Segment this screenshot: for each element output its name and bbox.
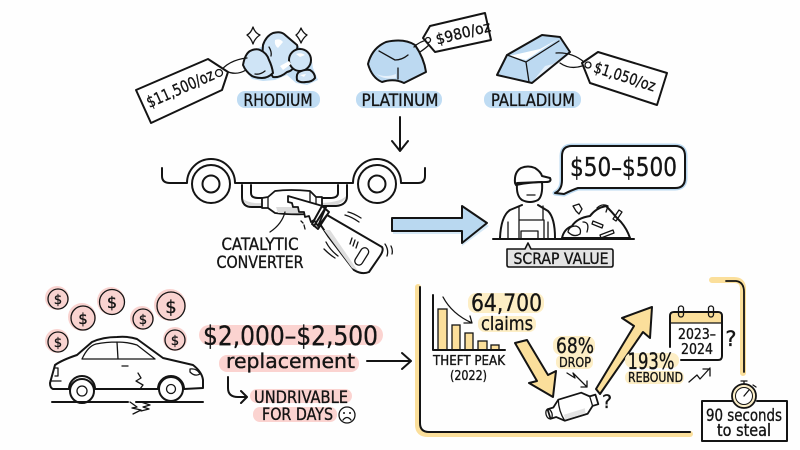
tag: scrap value: SCRAP VALUE [514,249,608,268]
icon: dollar coins: $ [139,313,147,328]
heading: replacement cost: replacement [226,349,355,373]
label: platinum: PLATINUM [362,91,438,111]
label: rhodium: RHODIUM [244,91,312,111]
car underbody [162,159,425,183]
frame [418,280,744,434]
callout: 90 seconds to steal: 90 seconds [706,406,782,425]
callout: 90 seconds to steal: to steal [717,421,771,440]
icon: dollar coins: $ [54,336,62,351]
icon: left wheel [192,165,230,203]
arrow: metals to car [392,117,408,151]
price tag: palladium [556,52,667,105]
price tag: platinum [414,13,493,52]
arrow: curved to undrivable [228,377,247,403]
icon: damaged car [50,337,203,414]
icon: reciprocating saw [288,196,392,273]
price tag: palladium: $1,050/oz [591,59,658,95]
price tag: platinum: $980/oz [434,17,493,48]
panel: car underside with converter [162,159,425,273]
callout: undrivable for days [250,388,355,425]
heading: replacement cost [199,321,383,373]
price tag: rhodium [136,58,247,123]
heading: replacement cost: $2,000–$2,500 [203,321,378,352]
icon: dollar coins: $ [54,293,62,308]
icon: catalytic converter [543,389,600,425]
icon: right wheel [358,165,396,203]
panel: precious metals [136,13,667,123]
panel: scrap yard [493,146,685,268]
label: catalytic converter: CONVERTER [216,253,304,272]
stat: 64,700 claims: claims [481,313,533,335]
arrow: rebound [596,307,652,394]
icon: platinum nugget [368,41,426,83]
icon: worker [500,166,555,238]
icon: dollar coins: $ [165,297,177,318]
speech bubble: scrap price [555,146,685,194]
stat: 193% rebound [625,350,710,386]
icon: dollar coins [45,286,187,353]
icon: calendar 2023-2024: 2024 [681,340,713,358]
stat: 64,700 claims [468,289,544,335]
speech bubble: scrap price: $50–$500 [570,153,677,183]
arrow: cost to trends [367,353,411,369]
icon: calendar 2023-2024 [670,306,722,360]
stat: 193% rebound: REBOUND [628,371,683,386]
icon: dollar coins: $ [171,334,179,349]
panel: cost to the owner [45,286,411,425]
stat: 68% drop: 68% [556,334,594,358]
stat: 64,700 claims: 64,700 [471,289,542,317]
icon: palladium ingot [497,35,570,83]
bar chart: theft peak: (2022) [450,369,487,384]
callout: undrivable for days: FOR DAYS [262,405,333,425]
icon: sparkles [247,27,307,44]
stat: 68% drop: DROP [559,355,591,371]
stat: 193% rebound: 193% [628,350,674,375]
callout: 90 seconds to steal [702,381,787,441]
text: question mark: ? [725,327,737,351]
icon: dollar coins: $ [78,310,88,328]
label: catalytic converter [216,235,304,272]
arrow: drop [515,340,556,397]
arrow: blue arrow to scrap [392,206,489,246]
price tag: rhodium: $11,500/oz [143,65,217,112]
bar chart: theft peak: THEFT PEAK [432,354,505,369]
callout: undrivable for days: UNDRIVABLE [254,388,348,408]
label: palladium: PALLADIUM [491,91,575,111]
ground line [493,238,634,240]
stat: 68% drop [553,334,595,371]
tag: scrap value [507,243,613,268]
arrow: zigzag down [567,373,587,387]
bar chart: theft peak [432,295,505,384]
text: question mark: ? [602,391,612,413]
label: catalytic converter: CATALYTIC [222,235,298,254]
leader line [270,212,285,232]
icon: calendar 2023-2024: 2023– [678,325,716,343]
panel: theft trend frame [418,280,787,441]
icon: dollar coins: $ [107,293,117,312]
arrow: trend up [689,368,710,382]
icon: catalytic converter and pipes [242,185,347,214]
icon: rhodium nuggets [243,27,318,85]
icon: stopwatch [732,381,756,408]
icon: scrap pile [562,204,630,238]
